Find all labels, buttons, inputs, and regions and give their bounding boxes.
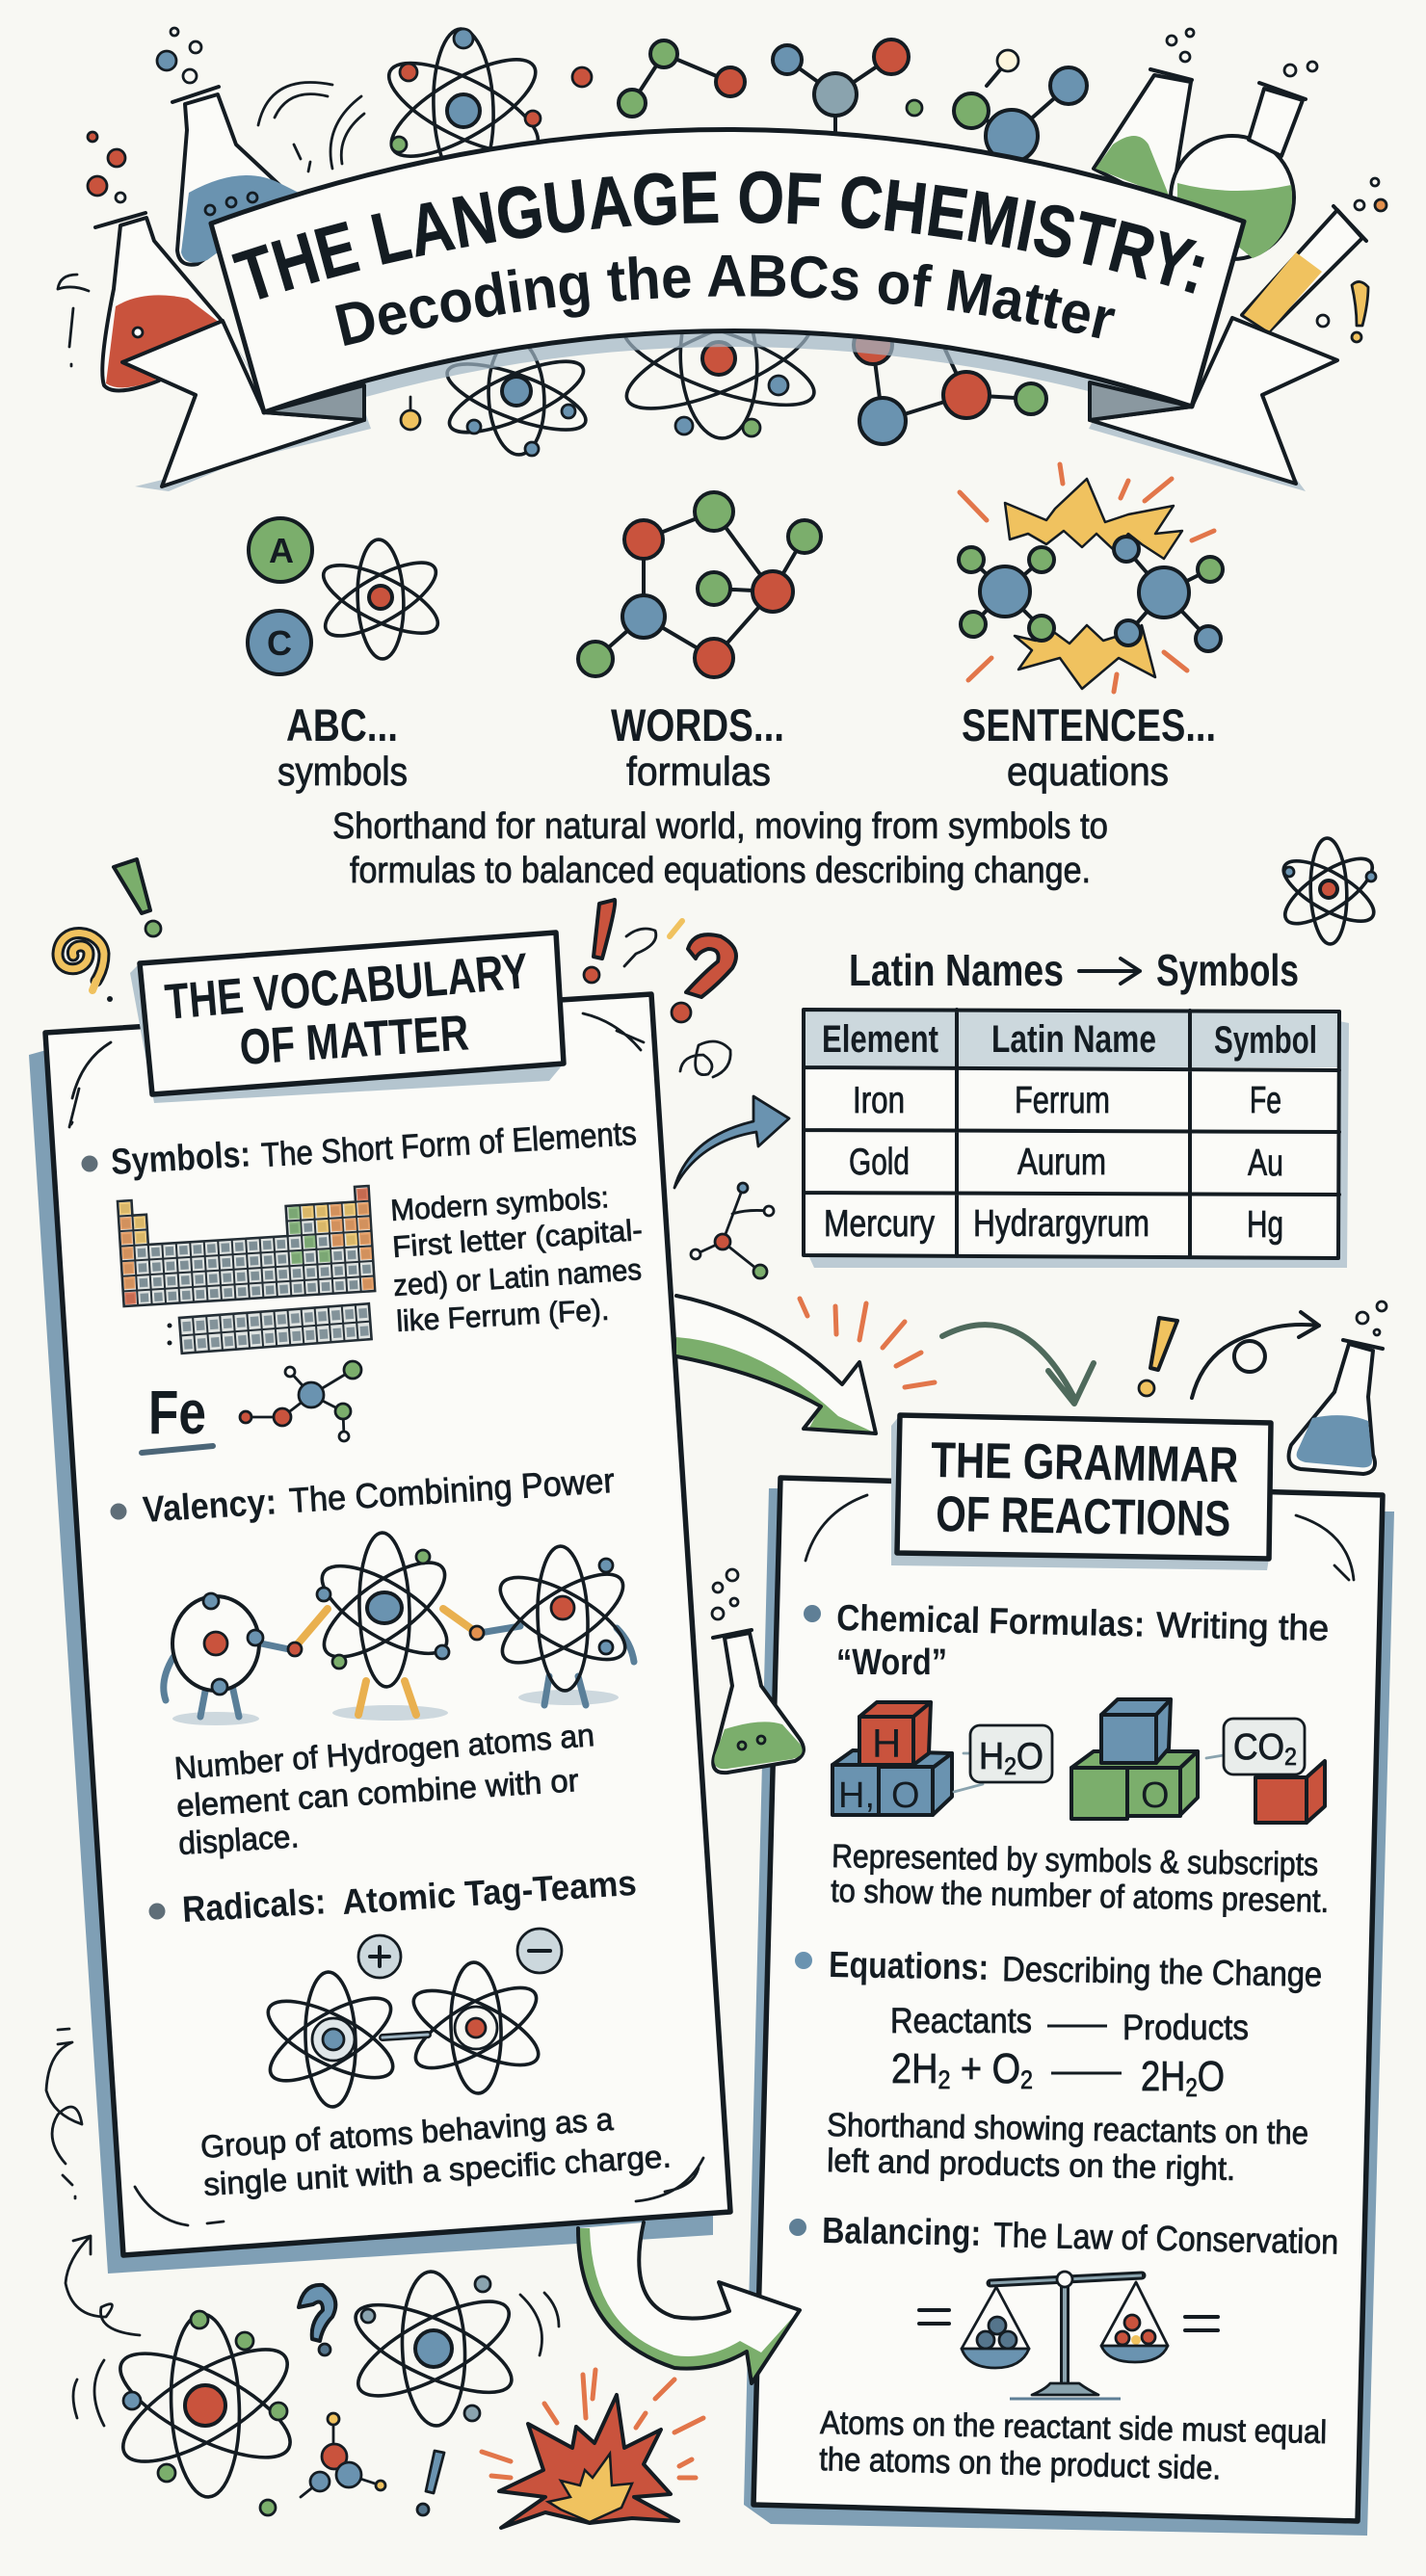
symbol: Fe: Fe <box>148 1378 206 1447</box>
heading box: OF REACTIONS <box>936 1486 1231 1547</box>
icon: H2O blocks: O <box>1017 1736 1043 1777</box>
table body: Au <box>1248 1143 1283 1184</box>
panel: grammar of reactions <box>744 1415 1394 2536</box>
panel body <box>753 1478 1383 2521</box>
header decorations: flasks, atoms, molecules <box>58 28 1386 456</box>
icon: H2O blocks: H <box>979 1736 1006 1777</box>
text: valency description <box>173 1717 595 1861</box>
icon: red question <box>672 934 736 1022</box>
icon: letter atoms: A <box>269 531 294 570</box>
banner shadow <box>135 310 1306 491</box>
icon: top atom <box>377 28 550 188</box>
table body: Mercury <box>824 1203 935 1245</box>
icon: CO2 blocks <box>1071 1699 1325 1823</box>
icon: red exclamation <box>584 900 615 983</box>
intro text: Shorthand for natural world, moving from symbols to <box>332 806 1108 847</box>
text: modern symbols: Modern symbols: <box>389 1180 610 1227</box>
corner flourishes <box>805 1495 1354 1580</box>
table body: Fe <box>1250 1080 1281 1121</box>
icon: blue flask <box>172 87 299 265</box>
icon: yellow exclamation <box>1139 1318 1177 1396</box>
icon: bonded radical atoms <box>257 1929 562 2108</box>
decorations above grammar panel <box>578 1296 1386 2383</box>
icon: small network molecule <box>691 1183 774 1278</box>
text: modern symbols: zed) or Latin names <box>392 1252 643 1302</box>
heading: equations: Equations: <box>829 1945 990 1988</box>
subtitle: Decoding the ABCs of Matter <box>335 254 1116 346</box>
equation: word form: Products <box>1122 2008 1249 2047</box>
text: radicals description: single unit with a specific charge. <box>202 2138 673 2202</box>
label: ABC: ABC... <box>286 699 398 750</box>
title: THE LANGUAGE OF CHEMISTRY: <box>231 171 1204 300</box>
equation: formula form: 2 <box>1185 2073 1198 2102</box>
panel: vocabulary of matter <box>29 933 730 2274</box>
table body: Hg <box>1247 1204 1283 1246</box>
table body: Latin Name <box>991 1018 1156 1061</box>
text: valency description: Number of Hydrogen atoms an <box>173 1717 595 1786</box>
icon: red dot <box>572 67 592 87</box>
heading box <box>130 933 564 1103</box>
text: balancing description: Atoms on the reactant side must equal <box>820 2405 1327 2451</box>
heading: chemical formulas: Chemical Formulas: <box>836 1598 1146 1645</box>
table heading <box>849 945 1299 995</box>
arrow: blue to table <box>674 1096 789 1188</box>
latin names table <box>804 945 1349 1268</box>
text: equations description: left and products on the right. <box>827 2142 1236 2188</box>
heading: symbols: The Short Form of Elements <box>260 1115 638 1174</box>
icon: motion lines <box>258 83 364 171</box>
heading: chemical formulas: Writing the <box>1156 1605 1330 1648</box>
label: WORDS: WORDS... <box>611 699 784 750</box>
bullet: balancing <box>789 2219 806 2236</box>
icon: left bubbles <box>58 28 201 366</box>
heading: radicals: Radicals: <box>181 1881 327 1931</box>
icon: letter atoms <box>248 518 447 674</box>
table body: Gold <box>849 1142 910 1183</box>
text: valency description: element can combine with or <box>175 1762 580 1824</box>
heading: radicals <box>181 1863 638 1931</box>
table body: Hydrargyrum <box>973 1203 1149 1245</box>
icon: blue atom <box>342 2271 559 2427</box>
panel body <box>45 994 730 2255</box>
icon: grey question mark <box>299 2285 335 2355</box>
banner main ribbon <box>211 129 1244 412</box>
heading: equations <box>829 1945 1323 1994</box>
label: formulas: formulas <box>626 749 771 794</box>
icon: grey exclamation <box>417 2451 444 2515</box>
text: formulas description <box>831 1838 1330 1920</box>
icon: small molecule <box>260 2413 385 2515</box>
arrow: grey-green curve <box>942 1325 1094 1404</box>
heading: equations: Describing the Change <box>1002 1949 1323 1994</box>
icon: H2O blocks <box>832 1702 1052 1816</box>
table body <box>804 1010 1339 1258</box>
icon: CO2 blocks: CO <box>1233 1727 1288 1768</box>
equation: word form: Reactants <box>890 2001 1032 2040</box>
text: modern symbols: First letter (capital- <box>391 1213 644 1264</box>
chart: periodic table <box>118 1186 375 1354</box>
text: valency description: displace. <box>177 1818 300 1861</box>
icon: blue flask top right <box>1289 1301 1386 1474</box>
heading box: OF MATTER <box>238 1005 470 1076</box>
table heading: Symbols <box>1156 945 1299 995</box>
banner <box>119 127 1339 491</box>
icon: top right atom <box>1276 837 1382 945</box>
table body: Element <box>822 1018 938 1061</box>
heading box: THE VOCABULARY <box>163 943 531 1031</box>
icon: H2O blocks: H, <box>838 1775 875 1816</box>
heading: symbols <box>110 1115 638 1183</box>
icon: formula molecule <box>578 492 821 677</box>
text: radicals description <box>199 2101 673 2202</box>
label: symbols: symbols <box>277 749 408 794</box>
icon: left curly doodle <box>46 2029 82 2198</box>
arrow: loop <box>1192 1312 1319 1398</box>
icon: balance scale <box>919 2272 1218 2399</box>
icon: small question <box>624 929 656 966</box>
panel shadow <box>29 1050 713 2274</box>
label: equations: equations <box>1007 749 1169 794</box>
equation: formula form: O <box>1198 2053 1225 2100</box>
icon: big red atom <box>73 2311 304 2498</box>
arrow: curl <box>66 2236 140 2335</box>
text: equations description: Shorthand showing reactants on the <box>827 2107 1308 2152</box>
equation: formula form: 2H <box>891 2045 945 2092</box>
squiggle <box>680 1041 730 1077</box>
corner flourishes <box>69 1013 703 2225</box>
intro text: formulas to balanced equations describing change. <box>350 851 1091 891</box>
icon: explosion <box>482 2370 703 2528</box>
heading: radicals: Atomic Tag-Teams <box>341 1863 638 1922</box>
icon: green flask between panels <box>712 1569 804 1773</box>
sparks: orange <box>800 1299 935 1387</box>
intro text <box>332 806 1108 891</box>
icon: right flasks and test tube <box>1094 29 1386 342</box>
text: formulas description: to show the number of atoms present. <box>831 1873 1330 1920</box>
icon: H2O blocks: O <box>891 1775 920 1816</box>
text: formulas description: Represented by symbols & subscripts <box>832 1838 1318 1883</box>
icon: lower atom left <box>401 338 597 456</box>
icon: red flask <box>95 213 224 390</box>
bullet: equations <box>795 1952 812 1969</box>
bottom decorations <box>46 2029 703 2528</box>
heading: chemical formulas <box>836 1598 1330 1683</box>
text: modern symbols: like Ferrum (Fe). <box>395 1293 610 1338</box>
banner left tail <box>122 321 364 486</box>
text: radicals description: Group of atoms behaving as a <box>199 2101 615 2165</box>
equation: formula form: + O <box>950 2045 1020 2092</box>
text: modern symbols <box>389 1180 644 1338</box>
heading: valency: The Combining Power <box>288 1460 616 1520</box>
icon: holding-hands atoms <box>164 1532 636 1725</box>
bullet: chemical formulas <box>804 1605 821 1622</box>
equation: formula form: 2H <box>1141 2053 1195 2100</box>
doodles around vocabulary panel <box>58 859 736 1077</box>
arrow: big green to grammar panel <box>676 1296 876 1433</box>
banner right tail <box>1090 318 1337 484</box>
icon: lower molecule <box>854 326 1046 444</box>
icon: lower atom centre <box>607 283 831 439</box>
text: balancing description <box>819 2405 1327 2486</box>
heading: balancing <box>822 2211 1339 2261</box>
icon: Fe molecule <box>240 1361 361 1441</box>
icon: molecule two <box>773 39 922 135</box>
table body: Ferrum <box>1015 1080 1110 1121</box>
bullet: symbols <box>81 1156 98 1171</box>
table body: Symbol <box>1214 1019 1317 1062</box>
label: SENTENCES: SENTENCES... <box>962 699 1216 750</box>
table heading: Latin Names <box>849 945 1064 995</box>
heading box: THE GRAMMAR <box>931 1433 1239 1494</box>
text: equations description <box>827 2107 1308 2188</box>
icon: letter atoms: C <box>267 623 292 663</box>
heading: valency <box>142 1460 616 1531</box>
bullet: radicals <box>148 1904 166 1919</box>
heading: symbols: Symbols: <box>110 1134 251 1183</box>
icon: CO2 blocks: O <box>1141 1775 1170 1816</box>
icon: yellow swirl question <box>58 933 113 1002</box>
table body: Iron <box>853 1080 905 1121</box>
table shadow <box>809 1021 1349 1268</box>
heading box <box>891 1415 1271 1570</box>
arrow: green bottom curved <box>578 2222 800 2383</box>
icon: H2O blocks: H <box>872 1721 901 1766</box>
icon: molecule one <box>619 40 745 117</box>
text: balancing description: the atoms on the product side. <box>819 2441 1222 2486</box>
yellow dash <box>670 921 682 936</box>
equation: word form <box>890 2001 1249 2047</box>
heading: valency: Valency: <box>142 1482 277 1531</box>
panel shadow <box>744 1488 1394 2536</box>
heading: balancing: Balancing: <box>822 2211 982 2254</box>
equation: formula form: 2 <box>937 2065 950 2094</box>
equation: formula form: 2 <box>1020 2065 1033 2094</box>
heading: balancing: The Law of Conservation <box>993 2215 1339 2261</box>
heading: chemical formulas: “Word” <box>836 1643 947 1683</box>
equation: formula form <box>891 2045 1225 2102</box>
icon: CO2 blocks: 2 <box>1284 1744 1297 1771</box>
table body: Aurum <box>1017 1142 1106 1183</box>
icon: reaction burst <box>959 464 1223 692</box>
icon: molecule three <box>954 50 1087 162</box>
icon: green exclamation <box>114 859 161 936</box>
bullet: valency <box>110 1503 127 1520</box>
icon: H2O blocks: 2 <box>1004 1753 1017 1780</box>
intro: three stages <box>248 464 1223 891</box>
